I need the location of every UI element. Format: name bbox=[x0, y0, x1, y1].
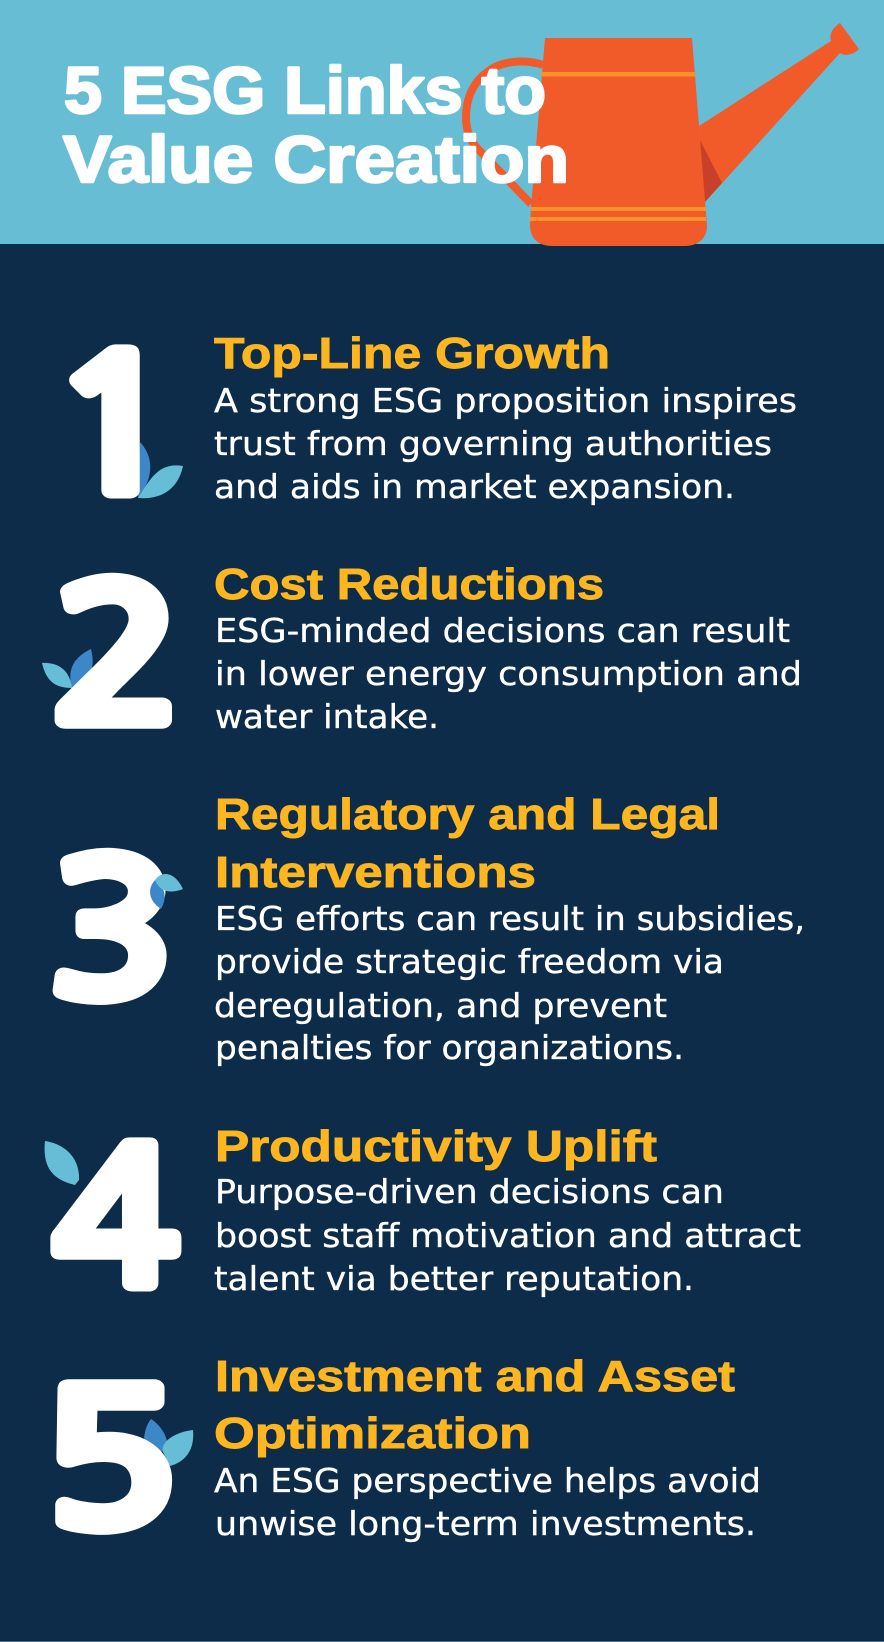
icon: leaves 3 bbox=[150, 874, 183, 909]
number 3: 3 bbox=[47, 841, 177, 1026]
number 1: 1 bbox=[48, 334, 183, 520]
title bbox=[63, 53, 569, 196]
icon: leaves 2 bbox=[42, 649, 93, 688]
icon: leaves 5 bbox=[144, 1419, 193, 1466]
icon: watering can bbox=[466, 23, 859, 246]
body text bbox=[214, 1462, 761, 1543]
panel: cost reductions bbox=[42, 560, 802, 750]
body text: provide strategic freedom via bbox=[215, 943, 724, 981]
title: 5 ESG Links to bbox=[64, 53, 546, 127]
panel: regulatory and legal interventions bbox=[47, 790, 805, 1067]
body text bbox=[214, 900, 805, 1067]
body text: deregulation, and prevent bbox=[214, 987, 667, 1025]
body text: talent via better reputation. bbox=[214, 1260, 694, 1298]
heading: Productivity Uplift bbox=[215, 1122, 657, 1171]
icon: leaf 4 bbox=[45, 1141, 79, 1185]
body text: ESG-minded decisions can result bbox=[215, 612, 790, 650]
body text bbox=[215, 612, 802, 736]
header band bbox=[0, 0, 884, 244]
body text: penalties for organizations. bbox=[215, 1029, 684, 1067]
body text: A strong ESG proposition inspires bbox=[214, 382, 797, 420]
body text bbox=[214, 1173, 801, 1298]
number 4: 4 bbox=[51, 1127, 181, 1313]
body text: Purpose-driven decisions can bbox=[215, 1173, 724, 1211]
body text: in lower energy consumption and bbox=[215, 655, 802, 693]
heading: Investment and Asset bbox=[215, 1352, 735, 1401]
body text bbox=[214, 382, 797, 506]
body text: water intake. bbox=[215, 698, 439, 736]
body text: and aids in market expansion. bbox=[214, 468, 735, 506]
body text: unwise long-term investments. bbox=[215, 1505, 756, 1543]
heading: Top-Line Growth bbox=[214, 329, 610, 378]
heading bbox=[215, 790, 720, 897]
heading: Regulatory and Legal bbox=[215, 790, 720, 839]
heading: Optimization bbox=[214, 1409, 531, 1458]
panel: productivity uplift bbox=[45, 1122, 801, 1313]
heading bbox=[214, 1352, 735, 1458]
title: Value Creation bbox=[63, 122, 569, 196]
heading: Cost Reductions bbox=[214, 560, 604, 609]
body text: An ESG perspective helps avoid bbox=[214, 1462, 761, 1500]
body text: boost staff motivation and attract bbox=[215, 1217, 801, 1255]
body text: ESG efforts can result in subsidies, bbox=[215, 900, 805, 938]
panel: top-line growth bbox=[48, 329, 797, 520]
heading: Interventions bbox=[215, 848, 536, 897]
icon: leaves 1 bbox=[138, 442, 183, 498]
body text: trust from governing authorities bbox=[214, 425, 772, 463]
number 5: 5 bbox=[40, 1371, 180, 1556]
panel: investment and asset optimization bbox=[40, 1352, 761, 1556]
number 2: 2 bbox=[49, 564, 185, 750]
